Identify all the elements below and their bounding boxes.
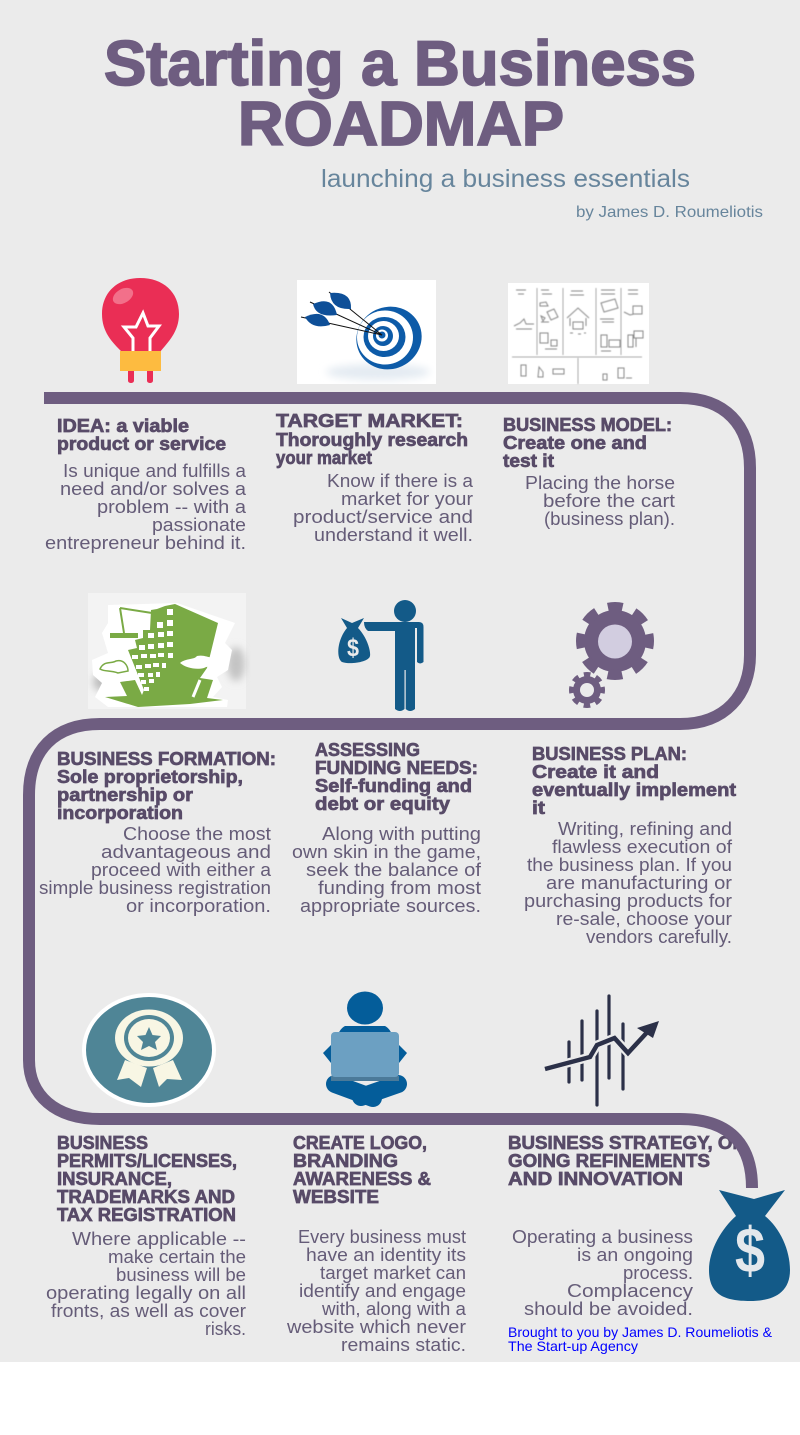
text: business permits: fronts, as well as cover	[51, 1301, 246, 1321]
text: idea: problem -- with a	[97, 497, 247, 517]
text: business strategy: should be avoided.	[524, 1299, 693, 1319]
heading: business formation: Sole proprietorship,	[57, 767, 243, 787]
text: idea: passionate	[152, 515, 246, 535]
title	[104, 29, 696, 159]
text: business permits	[46, 1229, 246, 1339]
icon: business model canvas sketch	[508, 283, 649, 384]
text: business plan: are manufacturing or	[546, 873, 732, 893]
icon: person holding money bag	[338, 600, 424, 711]
panel: business model	[503, 415, 675, 529]
text: assessing funding needs: seek the balance of	[306, 860, 482, 880]
panel: idea	[45, 416, 247, 553]
text: business strategy: process.	[623, 1263, 693, 1283]
text: idea: Is unique and fulfills a	[63, 461, 247, 481]
text: business formation: simple business registration	[39, 878, 271, 898]
text: assessing funding needs: appropriate sources.	[300, 896, 481, 916]
heading: logo and branding: CREATE LOGO,	[293, 1133, 427, 1153]
panel: assessing funding needs	[292, 740, 482, 916]
credit line	[508, 1324, 773, 1354]
text: business plan: the business plan. If you	[527, 855, 732, 875]
text: business plan: Writing, refining and	[558, 819, 732, 839]
text: business plan: re-sale, choose your	[556, 909, 732, 929]
heading: assessing funding needs: FUNDING NEEDS:	[315, 758, 478, 778]
heading: business plan: it	[532, 798, 545, 818]
text: assessing funding needs: Along with putting	[322, 824, 481, 844]
title: ROADMAP	[238, 90, 564, 159]
heading: business strategy: AND INNOVATION	[508, 1169, 683, 1189]
text: logo and branding: remains static.	[341, 1335, 466, 1355]
text: business formation: or incorporation.	[126, 896, 271, 916]
panel: logo and branding	[286, 1133, 467, 1355]
icon: target with arrows	[297, 280, 436, 384]
icon: gears	[572, 607, 649, 706]
text: business strategy: is an ongoing	[577, 1245, 693, 1265]
heading: business formation: partnership or	[57, 785, 193, 805]
heading: business strategy	[508, 1136, 736, 1186]
text: business strategy: Operating a business	[512, 1227, 693, 1247]
text: business formation	[39, 824, 272, 916]
heading: target market	[276, 411, 468, 468]
heading: idea: product or service	[57, 434, 226, 454]
text: business permits: make certain the	[108, 1247, 246, 1267]
text: business formation: proceed with either a	[91, 860, 272, 880]
text: idea	[45, 461, 247, 553]
heading: business plan	[532, 744, 736, 818]
heading: assessing funding needs: debt or equity	[315, 794, 450, 814]
heading: business model: Create one and	[503, 433, 647, 453]
icon: person holding money bag: $	[347, 634, 359, 662]
text: business formation: advantageous and	[101, 842, 271, 862]
heading: business permits: BUSINESS	[57, 1133, 148, 1153]
heading: business permits	[57, 1133, 237, 1225]
text: target market: product/service and	[293, 507, 473, 527]
heading: business model: test it	[503, 451, 554, 471]
heading: target market: Thoroughly research	[276, 430, 468, 450]
text: logo and branding: website which never	[286, 1317, 466, 1337]
text: idea: need and/or solves a	[60, 479, 247, 499]
text: business permits: Where applicable --	[72, 1229, 246, 1249]
heading: business strategy: BUSINESS STRATEGY, ON	[508, 1133, 746, 1153]
heading: logo and branding	[293, 1133, 431, 1207]
heading: logo and branding: BRANDING	[293, 1151, 398, 1171]
text: business model: before the cart	[543, 491, 675, 511]
heading: assessing funding needs: ASSESSING	[315, 740, 420, 760]
heading: assessing funding needs: Self-funding and	[315, 776, 472, 796]
text: target market: market for your	[341, 489, 473, 509]
heading: logo and branding: AWARENESS &	[293, 1169, 431, 1189]
text: business strategy	[512, 1227, 693, 1319]
text: logo and branding: target market can	[320, 1263, 466, 1283]
text: business strategy: Complacency	[567, 1281, 693, 1301]
text: target market	[293, 471, 474, 545]
panel: business permits	[46, 1133, 246, 1339]
text: business model	[525, 473, 675, 529]
text: business plan: flawless execution of	[552, 837, 733, 857]
icon: green building	[88, 593, 246, 709]
panel: target market	[276, 411, 474, 545]
text: business permits: business will be	[116, 1265, 246, 1285]
heading: business plan: eventually implement	[532, 780, 736, 800]
heading: business strategy: GOING REFINEMENTS	[508, 1151, 710, 1171]
panel: business strategy	[508, 1133, 746, 1319]
text: business plan	[524, 819, 733, 947]
heading: business permits: INSURANCE,	[57, 1169, 172, 1189]
text: target market: understand it well.	[314, 525, 473, 545]
heading: idea: IDEA: a viable	[57, 416, 189, 436]
heading: business permits: TAX REGISTRATION	[57, 1205, 236, 1225]
text: business plan: purchasing products for	[524, 891, 732, 911]
text: logo and branding: identify and engage	[299, 1281, 466, 1301]
icon: growth chart	[545, 996, 659, 1105]
heading: logo and branding: WEBSITE	[293, 1187, 379, 1207]
text: assessing funding needs: funding from most	[318, 878, 481, 898]
text: logo and branding	[286, 1227, 467, 1355]
heading: target market: TARGET MARKET:	[276, 411, 463, 431]
text: logo and branding: Every business must	[298, 1227, 466, 1247]
text: idea: entrepreneur behind it.	[45, 533, 246, 553]
text: assessing funding needs	[292, 824, 482, 916]
heading: business model	[503, 415, 672, 471]
icon: money bag: $	[735, 1214, 765, 1286]
text: business model: (business plan).	[544, 509, 675, 529]
text: business permits: risks.	[205, 1319, 246, 1339]
heading: business formation: incorporation	[57, 803, 183, 823]
icon: person with laptop	[323, 992, 407, 1098]
subtitle: launching a business essentials	[321, 165, 690, 193]
text: business model: Placing the horse	[525, 473, 675, 493]
heading: business plan: BUSINESS PLAN:	[532, 744, 687, 764]
panel: business formation	[39, 749, 276, 916]
text: target market: Know if there is a	[327, 471, 474, 491]
heading: business formation	[57, 749, 276, 823]
text: business permits: operating legally on all	[46, 1283, 246, 1303]
byline: by James D. Roumeliotis	[576, 204, 763, 221]
heading: business model: BUSINESS MODEL:	[503, 415, 672, 435]
credit line: Brought to you by James D. Roumeliotis &	[508, 1324, 773, 1340]
heading: business permits: TRADEMARKS AND	[57, 1187, 235, 1207]
heading: target market: your market	[276, 448, 372, 468]
heading: assessing funding needs	[315, 740, 478, 814]
panel: business plan	[524, 744, 736, 947]
title: Starting a Business	[104, 29, 696, 99]
text: assessing funding needs: own skin in the game,	[292, 842, 481, 862]
road: winding path	[29, 398, 752, 1188]
heading: business formation: BUSINESS FORMATION:	[57, 749, 276, 769]
text: logo and branding: with, along with a	[321, 1299, 467, 1319]
heading: idea	[57, 416, 226, 454]
text: business plan: vendors carefully.	[586, 927, 732, 947]
credit line: The Start-up Agency	[508, 1338, 638, 1354]
heading: business plan: Create it and	[532, 762, 659, 782]
icon: light bulb	[102, 278, 179, 383]
text: logo and branding: have an identity its	[306, 1245, 466, 1265]
icon: award badge	[84, 995, 214, 1105]
icon: money bag	[709, 1190, 790, 1301]
heading: business permits: PERMITS/LICENSES,	[57, 1151, 237, 1171]
text: business formation: Choose the most	[123, 824, 271, 844]
